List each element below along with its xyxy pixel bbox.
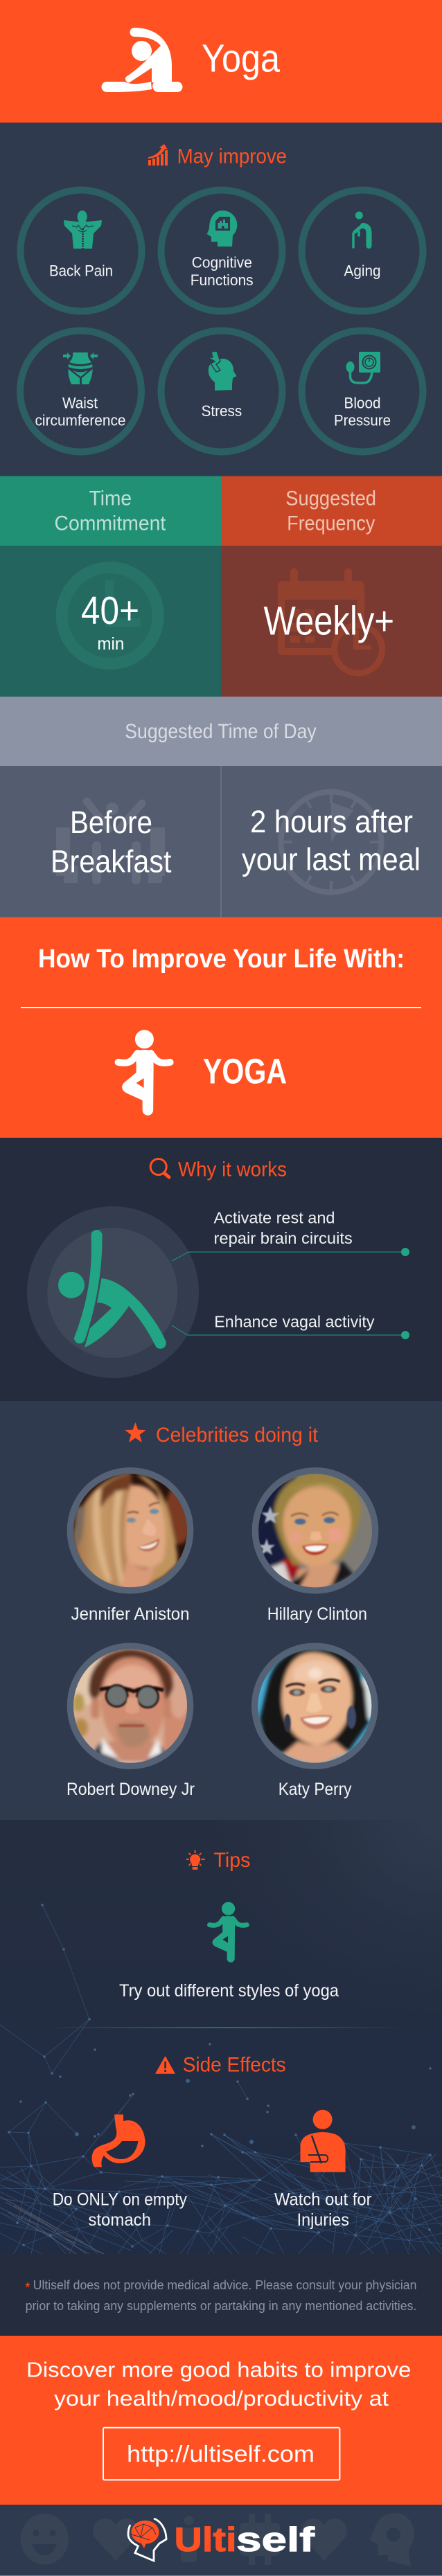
callout: activate rest and repair brain circuits: Activate rest and [213, 1208, 335, 1226]
side effect text: empty stomach: stomach [88, 2210, 151, 2230]
icon: faint breakfast setting [56, 801, 165, 884]
logo: Ultiself [128, 2519, 315, 2561]
tip text: Try out different styles of yoga [119, 1981, 339, 2001]
value: 2 hours after your last meal: 2 hours after [250, 804, 413, 839]
side effect text: injuries: Injuries [297, 2210, 349, 2230]
panel: celebrities [67, 1422, 378, 1798]
icon: tree pose teal [210, 1902, 247, 1962]
panel: why it works [0, 1138, 442, 1401]
icon: faint calendar and clock [278, 569, 382, 673]
call to action text [26, 2358, 411, 2410]
name: Robert Downey Jr: Robert Downey Jr [67, 1780, 195, 1799]
icon: blood pressure cuff [346, 352, 380, 383]
heading: Suggested Frequency: Frequency [287, 512, 375, 535]
item: Blood Pressure [302, 331, 423, 451]
label: Aging [344, 262, 381, 280]
label: Waist [62, 394, 98, 411]
icon: seated side-stretch yoga pose [102, 28, 182, 92]
heading: Suggested Frequency: Suggested [285, 488, 376, 510]
panel: may improve [0, 123, 442, 476]
icon: faint clock with pie [281, 792, 381, 892]
side effect text: injuries: Watch out for [274, 2190, 371, 2209]
background: faint habit icons [21, 2513, 414, 2566]
item: Stress [161, 331, 283, 451]
title: YOGA: YOGA [203, 1052, 287, 1091]
callout: activate rest and repair brain circuits [172, 1208, 409, 1261]
value: Before Breakfast: Before [70, 805, 152, 840]
icon: tree pose [118, 1030, 170, 1116]
panel: footer [0, 2505, 442, 2576]
panel: how to improve banner [0, 917, 442, 1138]
label: Back Pain [49, 262, 113, 280]
logo: Ultiself: self [236, 2521, 315, 2559]
portrait: Hillary Clinton [252, 1467, 378, 1594]
heading: Tips: Tips [213, 1849, 250, 1872]
panel: time commitment [0, 476, 221, 697]
icon: star [125, 1422, 146, 1442]
heading: Time Commitment [54, 488, 166, 535]
heading: Why it works: Why it works [178, 1159, 287, 1181]
icon: waist with arrows [63, 352, 98, 384]
call to action text: Discover more good habits to improve [26, 2358, 411, 2382]
item: Waist circumference [20, 331, 141, 451]
disclaimer text: prior to taking any supplements or partaking in any mentioned activities. [26, 2299, 417, 2313]
panel: suggested time of day [0, 697, 442, 917]
value: 2 hours after your last meal [242, 804, 421, 877]
value: Weekly+: Weekly+ [263, 598, 394, 644]
background: constellation network [0, 1905, 442, 2254]
callout: activate rest and repair brain circuits: repair brain circuits [213, 1229, 353, 1247]
callout: enhance vagal activity: Enhance vagal activity [214, 1312, 375, 1330]
icon: magnifier [150, 1159, 169, 1177]
panel: tips and side effects [0, 1820, 442, 2254]
icon: rising bars and arrow [148, 144, 168, 166]
portrait: Katy Perry [251, 1643, 378, 1769]
panel: suggested frequency [221, 476, 442, 697]
link box: http://ultiself.com [127, 2441, 315, 2467]
icon: warning triangle [155, 2056, 175, 2074]
value: Before Breakfast [51, 805, 172, 879]
icon: faint clock [56, 562, 164, 670]
icon: elderly person with cane [353, 212, 369, 247]
heading: Side Effects: Side Effects [183, 2053, 286, 2076]
logo: Ultiself: Ulti [175, 2521, 237, 2559]
disclaimer text: * [25, 2280, 30, 2296]
icon: head with lightning bolt [208, 351, 237, 391]
icon: light bulb [186, 1850, 205, 1870]
heading: Time Commitment: Commitment [54, 512, 166, 535]
title: Yoga: Yoga [202, 36, 280, 80]
item: Cognitive Functions [161, 190, 283, 312]
heading: Suggested Frequency [285, 488, 376, 535]
value: Before Breakfast: Breakfast [51, 843, 172, 879]
diagram: yoga figure in circle [27, 1206, 199, 1378]
portrait: Jennifer Aniston [67, 1467, 193, 1594]
item: Waist circumference: circumference [35, 412, 126, 429]
heading: Suggested Time of Day: Suggested Time of Day [125, 720, 317, 743]
label: Cognitive [192, 254, 252, 271]
call to action text: your health/mood/productivity at [54, 2386, 389, 2410]
value: 40+ min: min [97, 634, 124, 654]
heading: May improve: May improve [177, 145, 287, 168]
label: Stress [202, 402, 242, 420]
label: Blood [344, 394, 381, 411]
panel: call to action [0, 2336, 442, 2505]
disclaimer text [25, 2278, 417, 2313]
value: 2 hours after your last meal: your last meal [242, 842, 421, 877]
icon: back with spine [64, 211, 102, 249]
callout: enhance vagal activity [172, 1312, 409, 1339]
heading: How To Improve Your Life With: How To Improve Your Life With: [38, 945, 405, 974]
name: Jennifer Aniston: Jennifer Aniston [71, 1604, 189, 1624]
item: Back Pain [21, 190, 141, 312]
panel: disclaimer [0, 2254, 442, 2336]
name: Katy Perry: Katy Perry [279, 1780, 352, 1799]
value: 40+ min [81, 589, 139, 654]
icon: head with chip [207, 211, 237, 247]
heading: Celebrities doing it: Celebrities doing it [156, 1424, 319, 1447]
name: Hillary Clinton: Hillary Clinton [267, 1604, 367, 1624]
icon: person with arm sling [301, 2110, 346, 2172]
icon: stomach [92, 2115, 145, 2167]
heading: Time Commitment: Time [89, 488, 132, 510]
item: Cognitive Functions: Functions [191, 271, 254, 289]
side effect text: injuries [274, 2190, 371, 2230]
side effect text: empty stomach: Do ONLY on empty [53, 2190, 187, 2209]
panel: header [0, 0, 442, 123]
portrait: Robert Downey Jr [67, 1643, 193, 1769]
disclaimer text: Ultiself does not provide medical advice. Please consult your physician [33, 2278, 417, 2292]
item: Aging [302, 190, 423, 312]
side effect text: empty stomach [53, 2190, 187, 2230]
item: Blood Pressure: Pressure [334, 412, 391, 429]
link box [103, 2428, 339, 2480]
value: 40+ min: 40+ [81, 589, 139, 633]
